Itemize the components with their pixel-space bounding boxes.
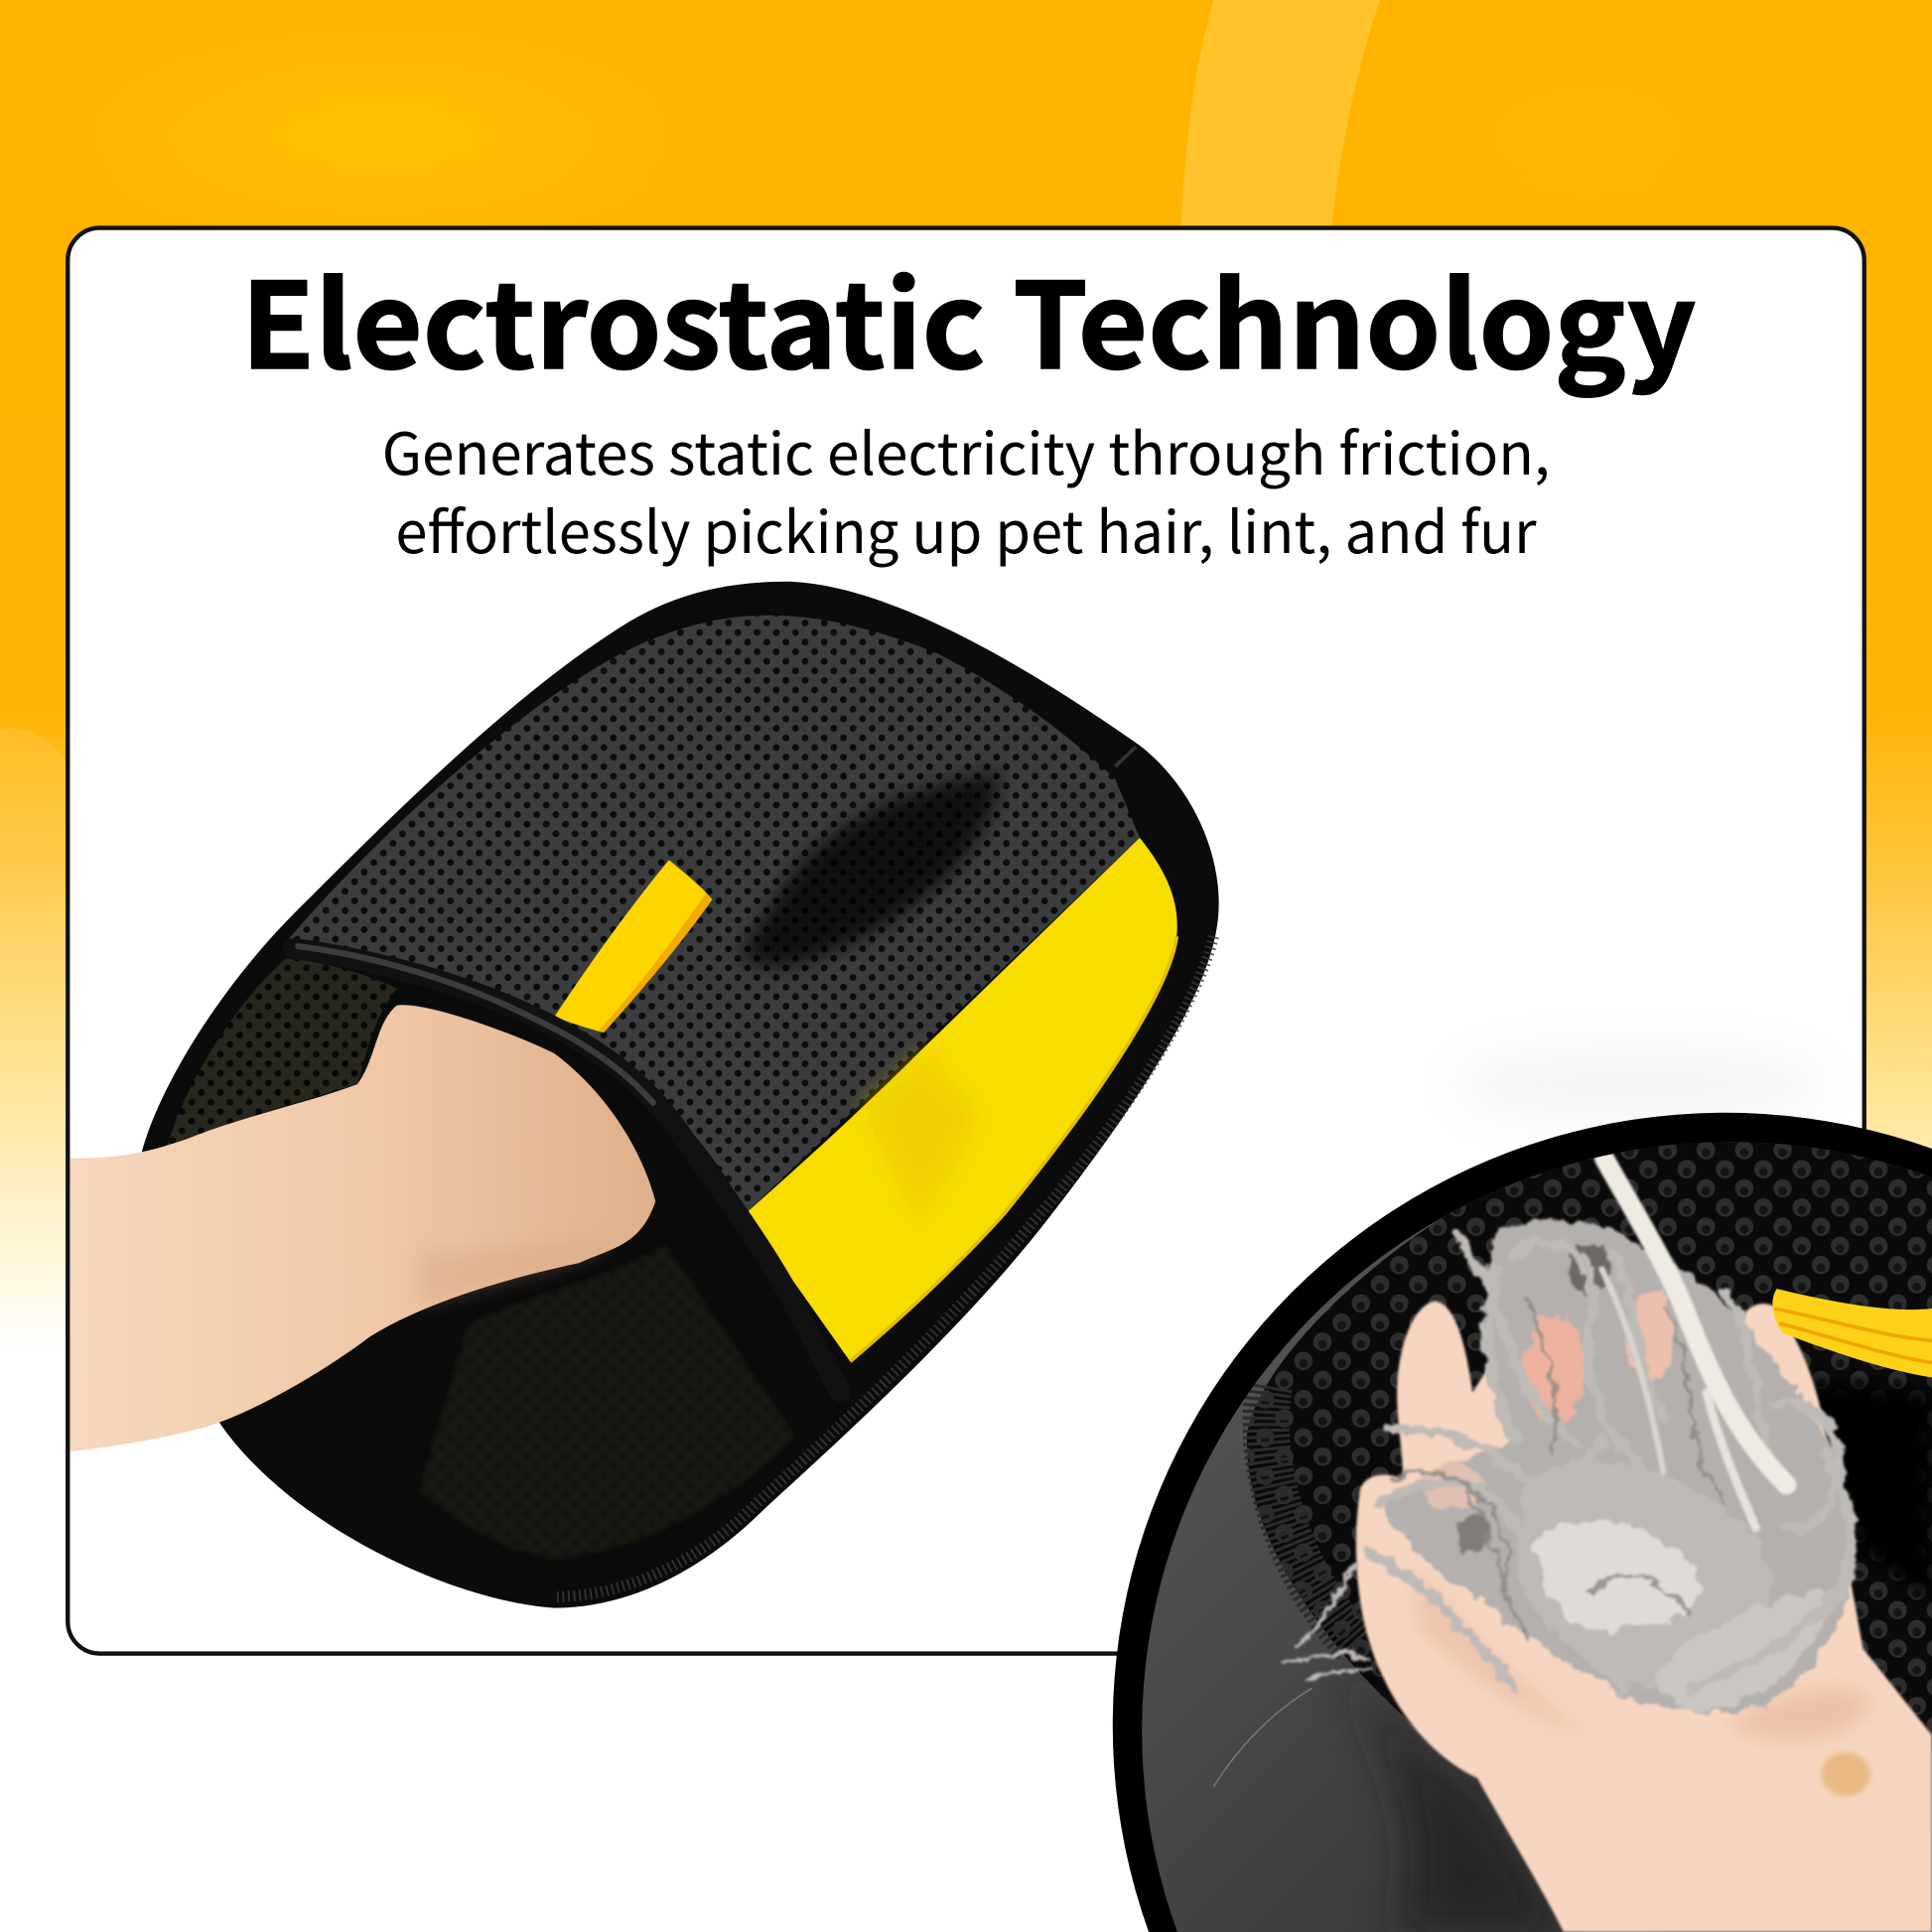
yellow panel [746, 838, 1177, 1361]
subtitle: effortlessly picking up pet hair, lint, and fur [395, 485, 1537, 570]
glove stitched edge [557, 936, 1213, 1596]
ribbed glove edge [1266, 1386, 1355, 1645]
surface shadow under hand [1364, 1683, 1551, 1932]
glove palm dent shadow [740, 770, 998, 966]
fingers and palm [1356, 1288, 1932, 1932]
glove body [142, 582, 1219, 1608]
white fur strand [1601, 1159, 1787, 1528]
glove upper mesh [286, 616, 1140, 1213]
inset circle photo: collected pet hair [1113, 1113, 1932, 1932]
hand and arm [70, 1005, 655, 1451]
circle background surface [1134, 1134, 1932, 1932]
black circle ring [1113, 1113, 1932, 1932]
subtitle: Generates static electricity through friction, [382, 407, 1550, 491]
panel: white rounded card [68, 228, 1864, 1654]
title: Electrostatic Technology [241, 232, 1696, 403]
glove mesh in circle [1247, 1128, 1932, 1749]
fur clump [1284, 1218, 1856, 1713]
photo: grooming glove on hand [70, 582, 1824, 1608]
black glove shadow [1799, 1380, 1932, 1601]
yellow strap [1772, 1289, 1932, 1378]
pocket hem [293, 946, 840, 1392]
glove lower pocket mesh [419, 1244, 794, 1559]
glove seam [1115, 747, 1136, 766]
glove left pocket mesh [167, 959, 397, 1149]
yellow loop tab [554, 860, 712, 1033]
subtitle [382, 407, 1550, 570]
faint stray hair [1213, 1688, 1312, 1787]
skin showing through fur [1525, 1315, 1585, 1425]
